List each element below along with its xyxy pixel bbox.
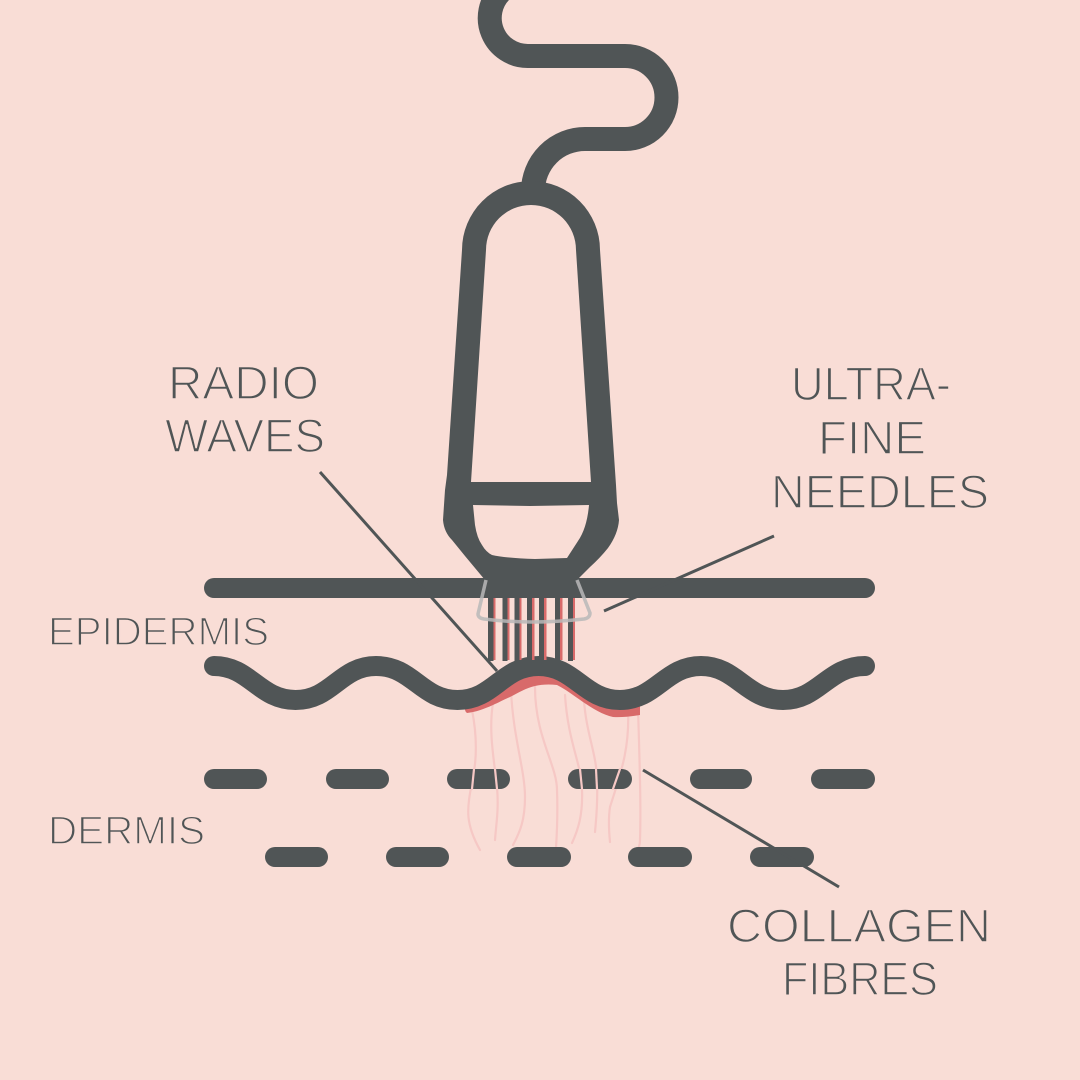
label: ultra-fine needles: FINE [818, 411, 926, 464]
leader line: collagen fibres [643, 770, 839, 887]
collagen fibres [468, 687, 640, 853]
dermis dashed layers [204, 769, 875, 867]
label: dermis: DERMIS [48, 809, 205, 853]
label: collagen fibres: FIBRES [782, 952, 938, 1005]
red needle highlights [493, 597, 575, 660]
needle guard outline [478, 580, 590, 622]
leader line: ultra-fine needles [604, 536, 774, 611]
skin surface line [204, 578, 875, 598]
label: epidermis: EPIDERMIS [48, 610, 269, 654]
label: ultra-fine needles: ULTRA- [791, 357, 951, 410]
dark needle bars [488, 578, 573, 661]
epidermis wave [214, 666, 865, 700]
leader line: radio waves [320, 472, 497, 671]
label: radio waves: WAVES [165, 409, 325, 462]
label: radio waves [165, 356, 325, 462]
label: collagen fibres [727, 899, 991, 1005]
collagen fibres over dermis [472, 769, 620, 789]
label: ultra-fine needles: NEEDLES [771, 465, 989, 518]
device handle [443, 181, 619, 580]
label: radio waves: RADIO [168, 356, 319, 409]
label: collagen fibres: COLLAGEN [727, 899, 991, 952]
device cable [490, 0, 666, 191]
label: ultra-fine needles [771, 357, 989, 518]
needles [488, 578, 575, 661]
heated red zone under skin [465, 668, 640, 717]
